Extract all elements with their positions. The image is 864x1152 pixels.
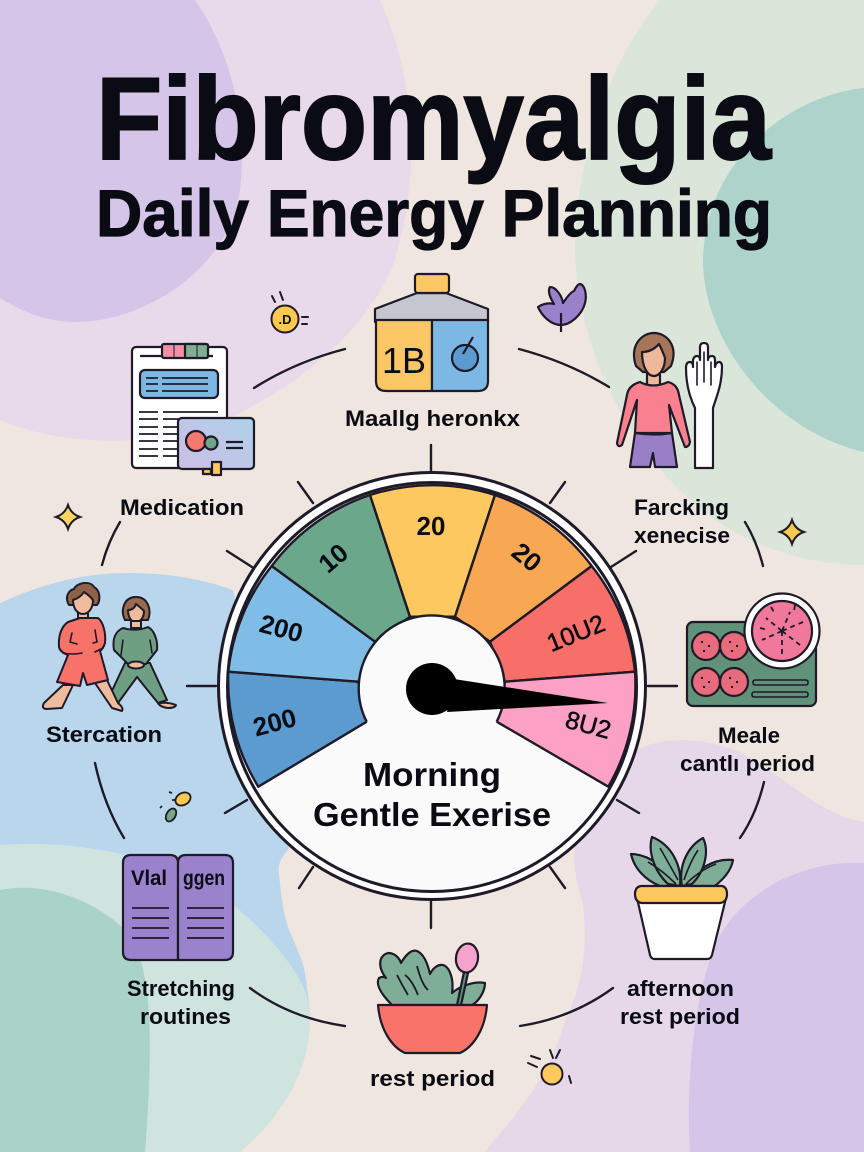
label: Meale cantlı period: Meale bbox=[718, 723, 780, 748]
label: Stretching routines: routines bbox=[140, 1004, 231, 1029]
dial wedge values: 20 bbox=[506, 536, 548, 578]
label: Farcking xenecise: xenecise bbox=[634, 523, 730, 548]
dial wedge values bbox=[250, 511, 614, 745]
icon: open book bbox=[123, 855, 233, 960]
label: Medication: Medication bbox=[120, 495, 244, 520]
dial caption: Gentle Exerise bbox=[313, 796, 551, 833]
label: Maallg heronkx: Maallg heronkx bbox=[345, 406, 521, 431]
label: afternoon rest period bbox=[620, 976, 740, 1029]
title bbox=[96, 53, 772, 250]
icon: meal tray bbox=[687, 594, 820, 706]
icon: potted plant bbox=[631, 837, 733, 959]
label: Farcking xenecise: Farcking bbox=[634, 495, 729, 520]
energy dial bbox=[217, 471, 647, 901]
connector arcs and ticks bbox=[95, 349, 764, 1026]
label: afternoon rest period: afternoon bbox=[627, 976, 734, 1001]
icon: clipboard with card bbox=[132, 344, 254, 475]
title: Daily Energy Planning bbox=[96, 176, 772, 250]
title: Fibromyalgia bbox=[96, 53, 772, 184]
label: Stretching routines bbox=[127, 976, 235, 1029]
icon: person with glove bbox=[617, 333, 722, 468]
dial wedge values: 8U2 bbox=[562, 706, 614, 745]
label: rest period: rest period bbox=[370, 1066, 495, 1091]
dial wedge values: 200 bbox=[256, 608, 306, 648]
icon: sparkle left bbox=[56, 505, 80, 529]
icon: small bulb bbox=[272, 292, 308, 332]
icon: small bulb: .D bbox=[278, 312, 292, 327]
dial caption: Morning bbox=[363, 756, 501, 793]
dial caption bbox=[313, 756, 551, 833]
icon: jar: 1B bbox=[382, 340, 426, 381]
icon: bowl with greens bbox=[378, 942, 487, 1053]
dial wedges bbox=[228, 485, 635, 787]
label: Farcking xenecise bbox=[634, 495, 730, 548]
label: Meale cantlı period: cantlı period bbox=[680, 751, 815, 776]
icon: purple leaf bbox=[538, 284, 586, 332]
dial wedge values: 10 bbox=[312, 537, 354, 579]
label: Stretching routines: Stretching bbox=[127, 976, 235, 1001]
dial hub bbox=[359, 615, 505, 761]
label: Meale cantlı period bbox=[680, 723, 815, 776]
icon: jar bbox=[375, 274, 488, 391]
icon: open book: ggen bbox=[183, 867, 225, 890]
dial wedge values: 10U2 bbox=[543, 609, 609, 658]
dial needle bbox=[406, 663, 608, 715]
icon: small sun bbox=[528, 1050, 571, 1084]
icon: open book: Vlal bbox=[131, 867, 167, 890]
label: Stercation: Stercation bbox=[46, 722, 162, 747]
icon: seed and leaf bbox=[160, 790, 193, 823]
dial wedge values: 20 bbox=[417, 511, 445, 541]
icon: two stretching figures bbox=[43, 583, 176, 711]
dial wedge values: 200 bbox=[250, 702, 300, 742]
icon: sparkle right bbox=[780, 520, 804, 544]
label: afternoon rest period: rest period bbox=[620, 1004, 740, 1029]
